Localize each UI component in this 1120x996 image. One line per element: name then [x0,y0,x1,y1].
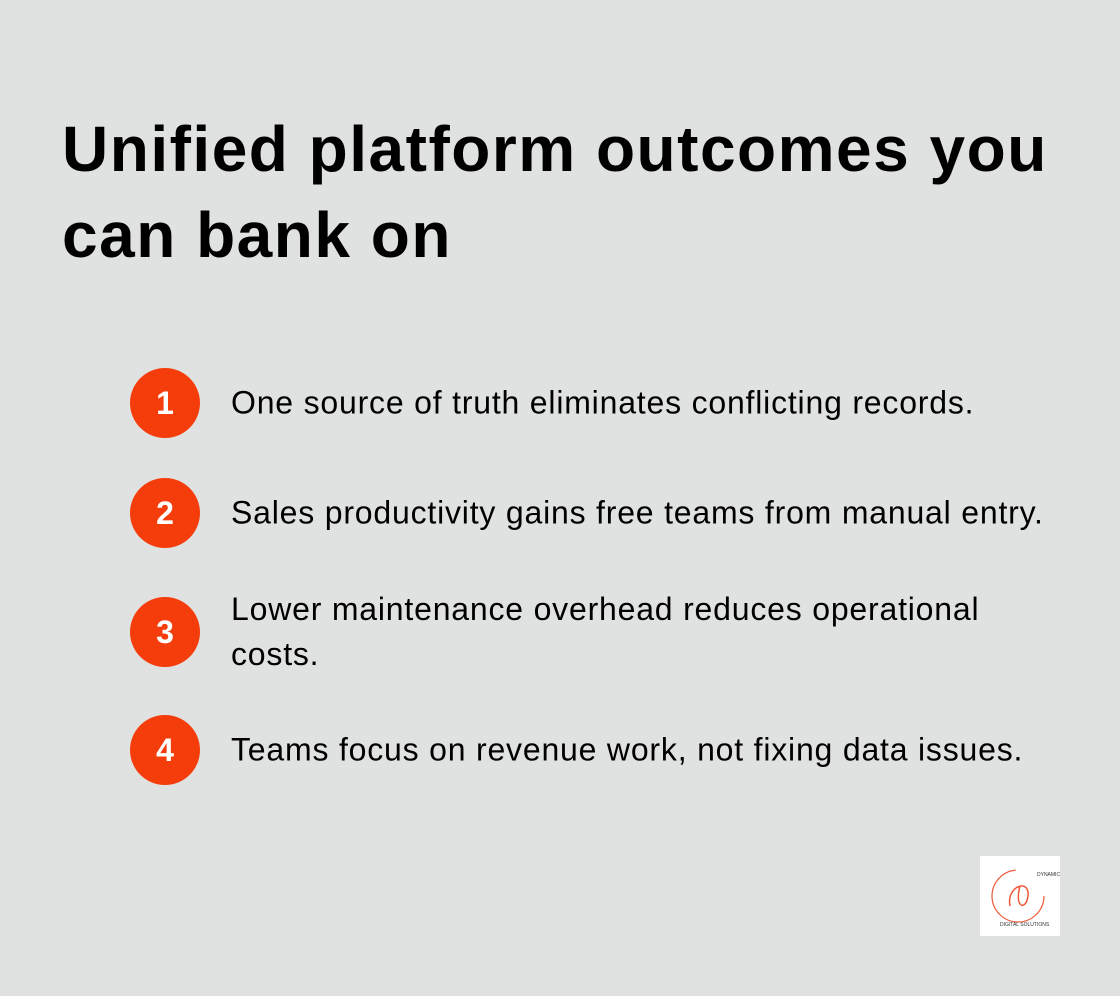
badge 1: 1 [156,385,174,421]
text 4: Teams focus on revenue work, not fixing data issues. [231,732,1023,768]
text 3: Lower maintenance overhead reduces operational [231,591,979,627]
item 2 [130,478,1044,548]
badge 1 [130,368,200,438]
badge 2 [130,478,200,548]
text 2: Sales productivity gains free teams from manual entry. [231,494,1044,530]
badge 3 [130,597,200,667]
text 3 [231,591,979,672]
badge 3: 3 [156,614,174,650]
title: can bank on [62,199,452,271]
logo: DYNAMIC [1037,872,1060,878]
item 3 [130,591,979,672]
text 1: One source of truth eliminates conflicting records. [231,384,974,420]
logo: DIGITAL SOLUTIONS [1000,922,1050,928]
item 1 [130,368,974,438]
title: Unified platform outcomes you [62,113,1048,185]
badge 2: 2 [156,495,174,531]
title [62,113,1048,271]
badge 4: 4 [156,732,174,768]
badge 4 [130,715,200,785]
text 3: costs. [231,636,319,672]
item 4 [130,715,1023,785]
logo [980,856,1060,936]
